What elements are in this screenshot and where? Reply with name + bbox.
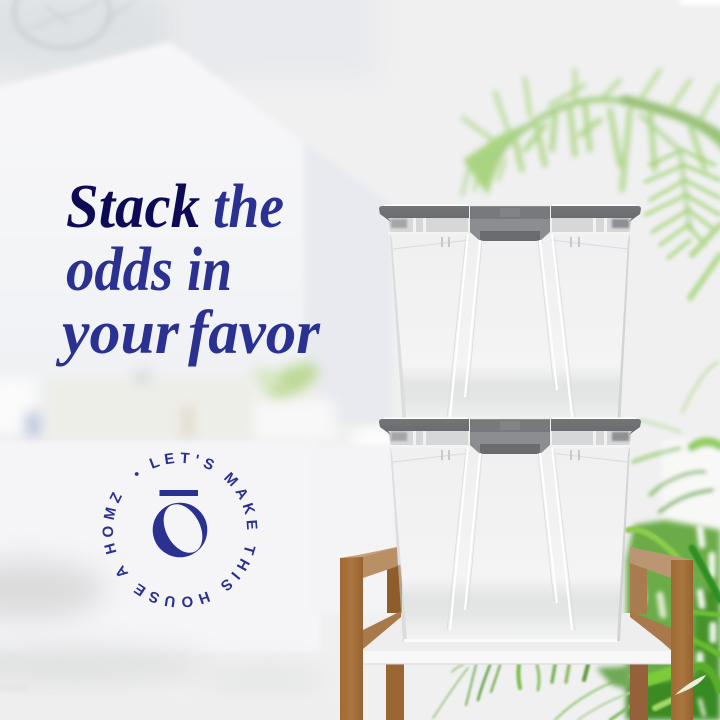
counter <box>0 442 320 652</box>
title word: odds: odds <box>66 236 173 304</box>
plant: upper palm <box>462 70 720 480</box>
shelf top <box>361 613 673 652</box>
left front leg <box>340 556 363 720</box>
title word: in: in <box>187 236 232 304</box>
rear legs <box>386 562 648 720</box>
blurred clock <box>14 0 135 48</box>
right top rail <box>630 547 693 578</box>
circular slogan: LET'S MAKE THIS HOUSE A HOMZ <box>102 452 258 608</box>
title word: Stack: Stack <box>66 173 200 241</box>
title word: favor: favor <box>188 299 321 367</box>
blurred floor shadows <box>0 560 340 720</box>
separator dot <box>135 472 139 476</box>
lower storage bin <box>379 418 641 642</box>
left top rail <box>363 547 398 578</box>
upper storage bin <box>379 205 641 428</box>
small plant in distance <box>250 356 323 404</box>
wall panel <box>0 42 305 445</box>
right front leg <box>671 560 693 720</box>
title word: the: the <box>213 173 284 241</box>
lower rails <box>363 611 401 649</box>
circular logo badge <box>102 452 258 608</box>
leaf in front of right leg <box>675 675 706 695</box>
plant: lower right foliage <box>433 362 720 720</box>
grass strands under shelf <box>433 665 632 720</box>
logo bar <box>160 490 198 496</box>
white highlight top right <box>680 0 720 5</box>
shelf front edge <box>361 651 673 664</box>
dense green mass <box>626 520 720 720</box>
title <box>55 173 321 367</box>
white gaps through foliage <box>640 528 713 715</box>
logo ring <box>153 503 207 557</box>
shelf unit <box>340 547 693 720</box>
title word: your: your <box>55 299 180 367</box>
blurred shelf items <box>0 370 400 520</box>
